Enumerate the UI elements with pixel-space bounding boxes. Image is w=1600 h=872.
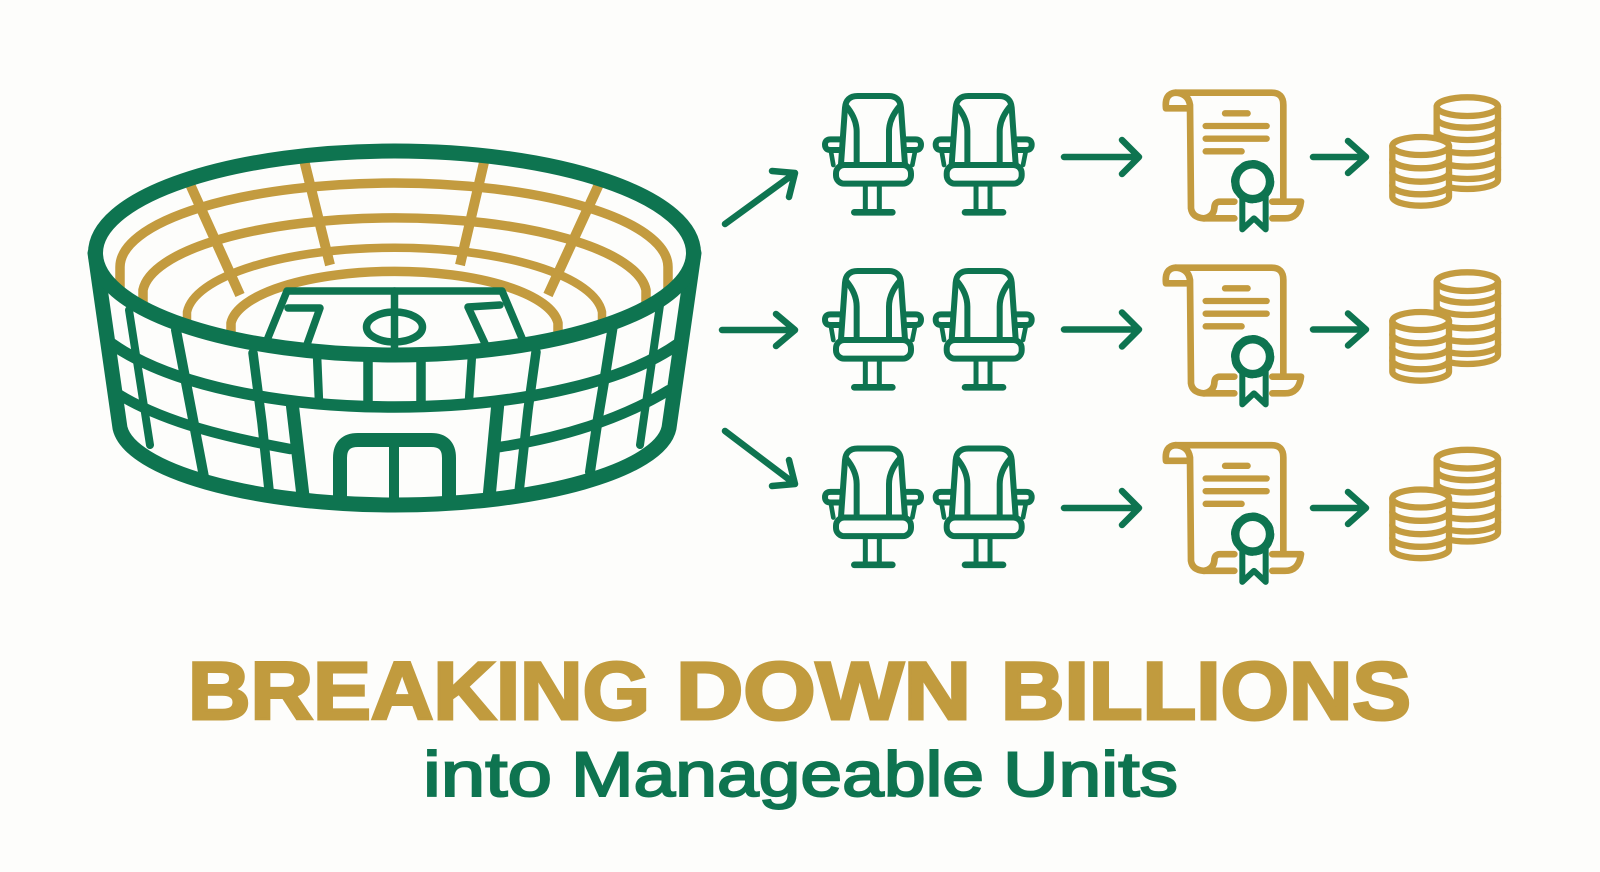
row 3: seats, certificate, coins [825,445,1498,582]
title: BREAKING [188,646,650,737]
stadium illustration [95,151,694,505]
title: BILLIONS [1001,646,1411,737]
stadium facade [112,305,678,502]
subtitle [423,740,1178,810]
seat pair [825,448,1032,565]
seat pair [825,96,1032,212]
row 2: seats, certificate, coins [825,268,1498,404]
stadium outer rim and base [95,151,694,505]
coin stacks [1392,97,1498,206]
entrance door [340,440,449,502]
row 1: seats, certificate, coins [825,93,1498,229]
arrow seats to certificate [1064,140,1139,174]
subtitle: into [423,740,552,810]
certificate scroll [1166,445,1301,582]
arrow: stadium to top row [725,171,795,224]
arrow certificate to coins [1313,314,1366,346]
certificate scroll [1166,93,1301,229]
arrow seats to certificate [1064,491,1139,525]
title: DOWN [676,646,971,737]
subtitle: Units [1003,740,1178,810]
arrow seats to certificate [1064,312,1139,346]
seat pair [825,271,1032,387]
certificate scroll [1166,268,1301,404]
arrow: stadium to bottom row [725,431,795,486]
arrow certificate to coins [1313,492,1366,524]
subtitle: Manageable [571,740,984,810]
arrow certificate to coins [1313,141,1366,173]
arrow: stadium to middle row [722,314,795,346]
stadium seating tiers [115,162,673,332]
football pitch [263,291,527,352]
coin stacks [1392,272,1498,381]
coin stacks [1392,450,1498,558]
title [188,646,1411,737]
